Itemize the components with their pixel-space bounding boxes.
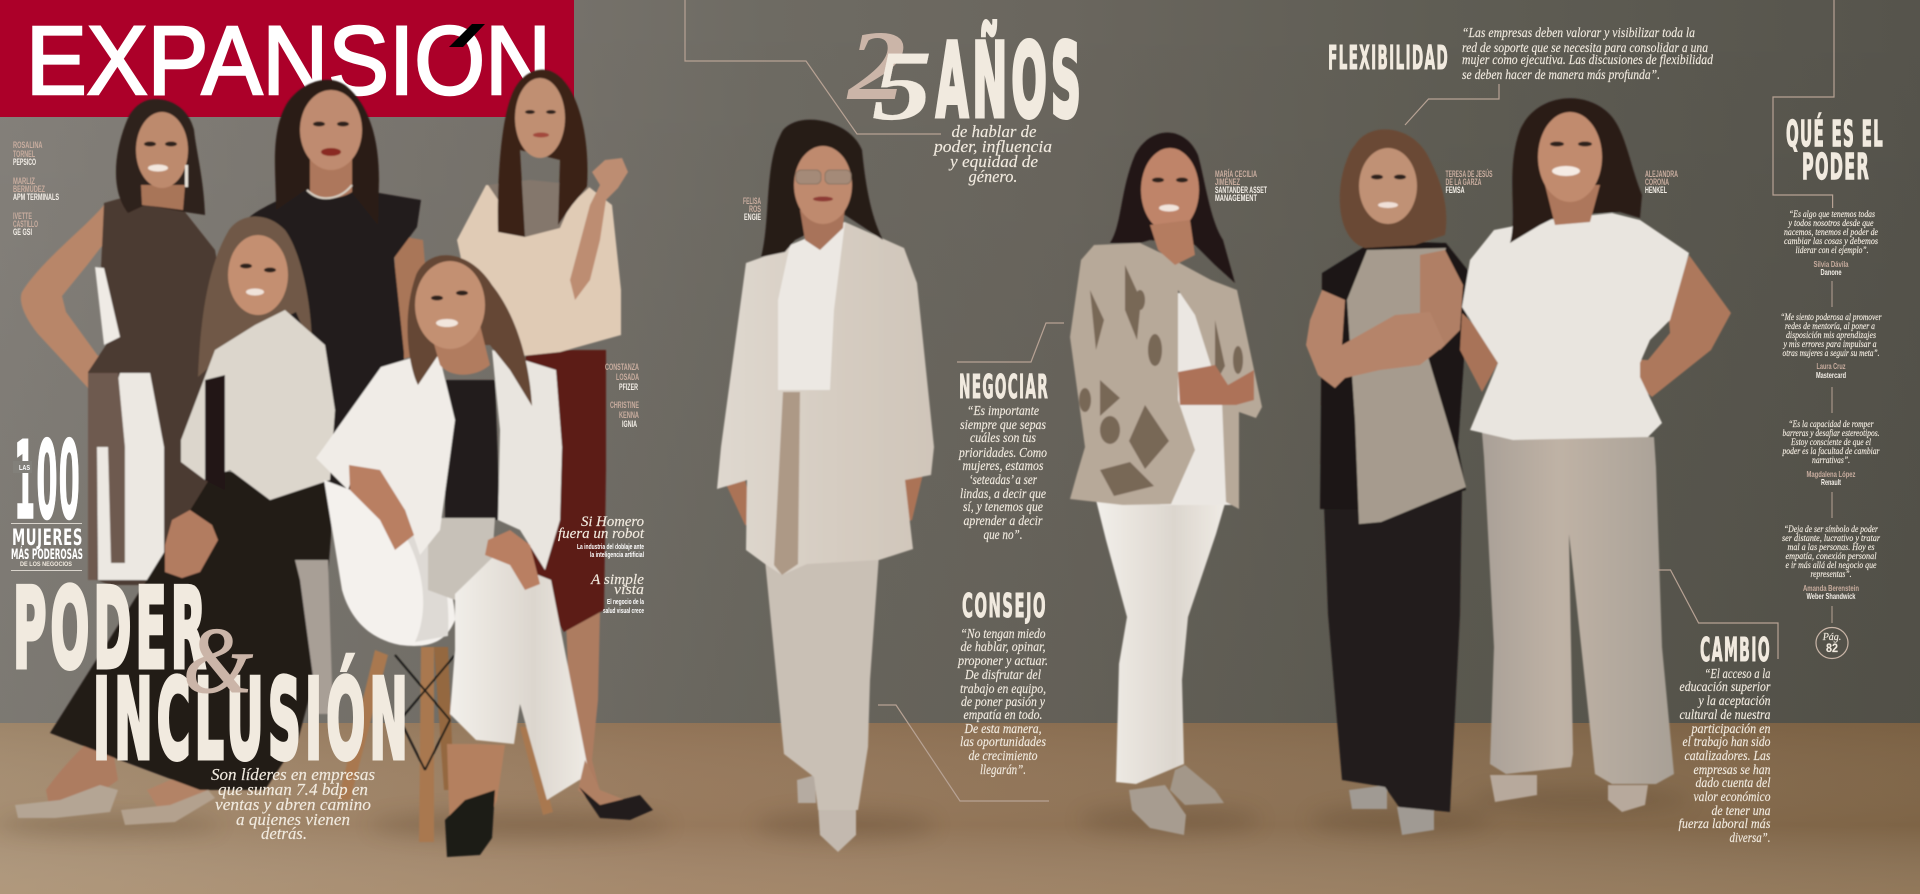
quote: cambio: fuerza laboral más — [1678, 816, 1770, 831]
quote: cambio: empresas se han — [1694, 762, 1771, 777]
quote: Magdalena López, Renault: Magdalena López — [1806, 469, 1856, 479]
name: María Cecilia Jiménez, Santander Asset Management: MANAGEMENT — [1215, 193, 1257, 203]
cover teaser: A simple vista: salud visual crece — [603, 606, 644, 615]
cover names — [13, 140, 639, 429]
name: María Cecilia Jiménez, Santander Asset Management: SANTANDER ASSET — [1215, 185, 1267, 195]
floor shadows — [0, 788, 1690, 839]
heading: 25 años: 2 — [846, 10, 906, 121]
badge: Las 100 mujeres más poderosas: MUJERES — [12, 526, 83, 551]
name: Teresa de Jesús de la Garza, Femsa: DE LA GARZA — [1446, 177, 1482, 187]
text: AÑOS — [936, 21, 1085, 141]
name: María Cecilia Jiménez, Santander Asset Management: MARÍA CECILIA — [1215, 169, 1257, 179]
section: qué es el poder — [1780, 113, 1884, 658]
connector line: cambio — [1658, 570, 1778, 659]
quote: Magdalena López, Renault: poder es la facultad de cambiar — [1782, 446, 1880, 457]
name: Christine Kenna, Ignia — [610, 400, 639, 429]
badge: Las 100 mujeres más poderosas: DE LOS NEGOCIOS — [20, 562, 72, 568]
quote: flexibilidad: red de soporte que se necesita para consolidar a una — [1462, 41, 1708, 56]
quote: Silvia Dávila, Danone: nacemos, tenemos el poder de — [1784, 228, 1878, 238]
name: Marliz Bermúdez, APM Terminals — [13, 176, 59, 202]
name: Christine Kenna, Ignia: KENNA — [619, 410, 639, 420]
quote: consejo — [957, 626, 1048, 777]
woman: Felisa Ros, beige suit — [717, 120, 934, 852]
cover headline: Poder & Inclusión: & — [183, 609, 253, 713]
text: INCLUSIÓN — [93, 656, 412, 785]
quote: cambio: diversa”. — [1730, 830, 1770, 845]
cover deck text: que suman 7.4 bdp en — [218, 780, 368, 799]
quote: flexibilidad: “Las empresas deben valorar y visibilizar toda la — [1462, 26, 1695, 41]
name: María Cecilia Jiménez, Santander Asset Management: JIMÉNEZ — [1215, 177, 1240, 187]
cover teaser: A simple vista: vista — [614, 582, 644, 598]
quote: cambio: valor económico — [1694, 789, 1771, 804]
quote: consejo: de crecimiento — [968, 748, 1038, 763]
quote: consejo: llegarán”. — [980, 762, 1026, 777]
page badge: Pág. 82: Pág. — [1822, 632, 1841, 643]
quote: consejo: de hablar, opinar, — [960, 639, 1046, 654]
quote: Magdalena López, Renault: “Es la capacidad de romper — [1788, 420, 1874, 430]
cover teaser: Si Homero fuera un robot — [558, 514, 645, 559]
quote: cambio: el trabajo han sido — [1682, 734, 1771, 749]
name: Alejandra Corona, Henkel: ALEJANDRA — [1645, 169, 1678, 179]
logo: EXPANSIÓN: EXPANSIÓN — [26, 6, 551, 115]
badge: Las 100 mujeres más poderosas — [11, 419, 83, 571]
quote: consejo: De disfrutar del — [964, 667, 1041, 682]
quote: Amanda Berenstein, Weber Shandwick: Weber Shandwick — [1806, 591, 1856, 601]
name: Ivette Castillo, GE GSI: IVETTE — [13, 211, 32, 221]
name: Ivette Castillo, GE GSI: GE GSI — [13, 227, 32, 237]
name: Teresa de Jesús de la Garza, Femsa: TERESA DE JESÚS — [1446, 168, 1492, 179]
quote: Magdalena López, Renault: narrativas”. — [1812, 456, 1850, 466]
quote: cambio: dado cuenta del — [1696, 775, 1771, 790]
quote: Amanda Berenstein, Weber Shandwick: e ir más allá del negocio que — [1786, 561, 1876, 571]
quote: negociar: “Es importante — [967, 403, 1039, 418]
quote: consejo: proponer y actuar. — [957, 653, 1048, 668]
quote: consejo: las oportunidades — [960, 734, 1046, 749]
cover deck text: Son líderes en empresas — [211, 765, 375, 784]
quote: consejo: “No tengan miedo — [960, 626, 1046, 641]
quote: Laura Cruz, Mastercard: redes de mentoría, al poner a — [1785, 322, 1875, 332]
connector line: negociar — [957, 323, 1064, 362]
quote: Laura Cruz, Mastercard: “Me siento poderosa al promover — [1780, 313, 1882, 323]
connector line: consejo — [878, 705, 1049, 801]
quote: Laura Cruz, Mastercard — [1780, 313, 1882, 380]
cover deck text: ventas y abren camino — [215, 795, 371, 814]
woman: Christine Kenna, seated on white chair in white suit — [316, 255, 653, 857]
floor — [0, 723, 1920, 894]
section: cambio — [1678, 630, 1771, 845]
name: Felisa Ros, Engie: FELISA — [743, 196, 761, 206]
section: flexibilidad — [1328, 26, 1714, 83]
quote: cambio: catalizadores. Las — [1684, 748, 1770, 763]
quote: Laura Cruz, Mastercard: Laura Cruz — [1816, 361, 1846, 371]
woman: Rosalina Tornel, brown dress — [21, 99, 226, 585]
subheading: de hablar de poder — [933, 122, 1052, 186]
woman: Constanza Losada, cream blouse and burgundy skirt — [457, 70, 628, 792]
quote: consejo: De esta manera, — [964, 721, 1042, 736]
name: Ivette Castillo, GE GSI: CASTILLO — [13, 219, 38, 229]
cover teaser: A simple vista: A simple — [590, 572, 644, 588]
woman: Marliz Bermúdez, black dress — [240, 80, 428, 500]
quote: negociar: aprender a decir — [964, 513, 1043, 528]
name: Constanza Losada, Pfizer: PFIZER — [619, 382, 638, 392]
name: María Cecilia Jiménez, Santander Asset Management — [1215, 169, 1267, 203]
cover headline: Poder & Inclusión — [13, 565, 412, 785]
quote: flexibilidad: mujer como ejecutiva. Las discusiones de flexibilidad — [1462, 53, 1714, 68]
cover teaser: Si Homero fuera un robot: la inteligencia artificial — [590, 550, 644, 559]
name: Alejandra Corona, Henkel: CORONA — [1645, 177, 1669, 187]
cover deck text: a quienes vienen — [236, 810, 350, 829]
quote: Amanda Berenstein, Weber Shandwick: Amanda Berenstein — [1803, 583, 1859, 593]
quote: Magdalena López, Renault: Estoy consciente de que el — [1790, 438, 1871, 448]
name: Alejandra Corona, Henkel: HENKEL — [1645, 185, 1667, 195]
quote: cambio: de tener una — [1712, 803, 1771, 818]
name: Teresa de Jesús de la Garza, Femsa — [1446, 168, 1492, 195]
quote: cambio: “El acceso a la — [1704, 666, 1771, 681]
quote: cambio — [1678, 666, 1771, 845]
quote: Laura Cruz, Mastercard: disposición mis aprendizajes — [1786, 331, 1876, 341]
cover deck text: detrás. — [261, 824, 307, 843]
quote: Magdalena López, Renault: Renault — [1821, 477, 1841, 487]
section: flexibilidad: FLEXIBILIDAD — [1328, 38, 1449, 77]
subheading: de hablar de poder: género. — [968, 167, 1018, 186]
quote: Magdalena López, Renault — [1782, 420, 1880, 487]
name: Marliz Bermúdez, APM Terminals: BERMÚDEZ — [13, 183, 45, 194]
logo: EXPANSIÓN — [32, 24, 545, 96]
quote: consejo: empatía en todo. — [964, 707, 1042, 722]
quote: flexibilidad — [1462, 26, 1714, 83]
woman: María Cecilia Jiménez, snakeskin jacket and white trousers — [1070, 132, 1262, 835]
quote: Amanda Berenstein, Weber Shandwick: empatía, conexión personal — [1786, 552, 1877, 562]
name: Rosalina Tornel, PepsiCo: TORNEL — [13, 149, 35, 159]
quote: negociar: lindas, a decir que — [960, 486, 1046, 501]
quote: consejo: trabajo en equipo, — [960, 681, 1046, 696]
subheading: de hablar de poder: de hablar de — [952, 122, 1037, 141]
name: Rosalina Tornel, PepsiCo: ROSALINA — [13, 140, 43, 150]
quote: Silvia Dávila, Danone — [1784, 210, 1878, 277]
quote: negociar: mujeres, estamos — [962, 458, 1044, 473]
name: Alejandra Corona, Henkel — [1645, 169, 1678, 195]
name: Constanza Losada, Pfizer: LOSADA — [616, 372, 639, 382]
quote: Silvia Dávila, Danone: liderar con el ejemplo”. — [1796, 246, 1868, 256]
connector line: 25 años — [685, 0, 941, 134]
quote: negociar: ‘seteadas’ a ser — [969, 472, 1038, 487]
name: Constanza Losada, Pfizer — [605, 362, 639, 392]
quote: Laura Cruz, Mastercard: Mastercard — [1816, 370, 1846, 380]
page badge: Pág. 82 — [1816, 628, 1848, 658]
cover group of five women — [15, 70, 653, 857]
section: negociar — [958, 367, 1049, 542]
quote: Magdalena López, Renault: barreras y desafiar estereotipos. — [1782, 428, 1880, 439]
quote: negociar: prioridades. Como — [958, 445, 1047, 460]
masthead banner — [0, 0, 574, 117]
text: 100 — [14, 419, 81, 544]
quote: cambio: y la aceptación — [1697, 693, 1771, 708]
quote: Amanda Berenstein, Weber Shandwick: mal a las personas. Hoy es — [1788, 543, 1875, 553]
section: consejo — [957, 586, 1048, 777]
quote: Laura Cruz, Mastercard: y mis errores para impulsar a — [1783, 340, 1877, 350]
quote: flexibilidad: se deben hacer de manera más profunda”. — [1462, 68, 1660, 83]
text: NEGOCIAR — [959, 367, 1049, 406]
cover teaser: Si Homero fuera un robot: fuera un robot — [558, 526, 645, 542]
name: Marliz Bermúdez, APM Terminals: MARLIZ — [13, 176, 35, 186]
quote: cambio: cultural de nuestra — [1680, 707, 1771, 722]
name: Felisa Ros, Engie: ENGIE — [744, 212, 761, 222]
quote: cambio: educación superior — [1680, 679, 1771, 694]
cover teaser: A simple vista — [590, 572, 645, 615]
text: CONSEJO — [962, 586, 1047, 625]
quote: Silvia Dávila, Danone: Silvia Dávila — [1814, 259, 1849, 269]
name: Felisa Ros, Engie — [743, 196, 761, 222]
cover deck text — [211, 765, 375, 843]
quote: negociar: siempre que sepas — [960, 417, 1046, 432]
subheading: de hablar de poder: y equidad de — [948, 152, 1038, 171]
quote: consejo: de poner pasión y — [961, 694, 1045, 709]
name: Marliz Bermúdez, APM Terminals: APM TERMINALS — [13, 192, 59, 202]
heading: 25 años: 5 — [872, 30, 932, 141]
quote: Silvia Dávila, Danone: cambiar las cosas y debemos — [1784, 237, 1878, 247]
name: Ivette Castillo, GE GSI — [13, 211, 38, 237]
cover teaser: A simple vista: El negocio de la — [607, 597, 645, 606]
woman: Teresa de Jesús de la Garza, pleated top and black trousers — [1306, 129, 1470, 835]
heading: qué es el poder — [1786, 113, 1884, 188]
cover teaser: Si Homero fuera un robot: La industria del doblaje ante — [577, 542, 644, 551]
woman: Ivette Castillo, seated with cream blazer and black skirt — [15, 216, 335, 825]
page badge: Pág. 82: 82 — [1826, 641, 1838, 655]
name: Felisa Ros, Engie: ROS — [749, 204, 761, 214]
quote: Silvia Dávila, Danone: “Es algo que tenemos todas — [1789, 210, 1875, 220]
name: Teresa de Jesús de la Garza, Femsa: FEMSA — [1446, 185, 1465, 195]
quote: cambio: participación en — [1691, 721, 1771, 736]
quote: negociar — [958, 403, 1047, 542]
subheading: de hablar de poder: poder, influencia — [933, 137, 1052, 156]
standing women on the spread — [717, 98, 1731, 852]
connector line: qué es el poder — [1773, 0, 1834, 208]
name: Christine Kenna, Ignia: IGNIA — [622, 419, 637, 429]
heading: 25 años — [846, 10, 1085, 141]
quote: Silvia Dávila, Danone: Danone — [1820, 267, 1842, 277]
badge: Las 100 mujeres más poderosas: MÁS PODEROSAS — [11, 546, 83, 563]
quote: negociar: cuáles son tus — [970, 430, 1036, 445]
name: Rosalina Tornel, PepsiCo — [13, 140, 43, 167]
badge: Las 100 mujeres más poderosas: LAS — [19, 465, 30, 472]
quote: Silvia Dávila, Danone: y todos nosotros desde que — [1788, 219, 1874, 229]
cover headline: Poder & Inclusión: PODER — [13, 565, 210, 694]
quote: negociar: sí, y tenemos que — [963, 499, 1043, 514]
woman: Alejandra Corona, white blouse and taupe trousers — [1460, 98, 1731, 812]
quote: Laura Cruz, Mastercard: otras mujeres a seguir su meta”. — [1782, 349, 1880, 359]
quote: Amanda Berenstein, Weber Shandwick — [1782, 525, 1880, 601]
name: Rosalina Tornel, PepsiCo: PEPSICO — [13, 157, 36, 167]
quote: Amanda Berenstein, Weber Shandwick: “Deja de ser símbolo de poder — [1784, 525, 1878, 535]
name: Christine Kenna, Ignia: CHRISTINE — [610, 400, 639, 410]
text: CAMBIO — [1700, 630, 1771, 669]
quote: Amanda Berenstein, Weber Shandwick: representas”. — [1810, 570, 1852, 580]
quote: Amanda Berenstein, Weber Shandwick: ser distante, lucrativo y tratar — [1782, 534, 1880, 544]
connector line: flexibilidad — [1405, 84, 1499, 125]
quote: negociar: que no”. — [984, 527, 1022, 542]
cover teaser: Si Homero fuera un robot: Si Homero — [581, 514, 644, 530]
name: Constanza Losada, Pfizer: CONSTANZA — [605, 362, 639, 372]
